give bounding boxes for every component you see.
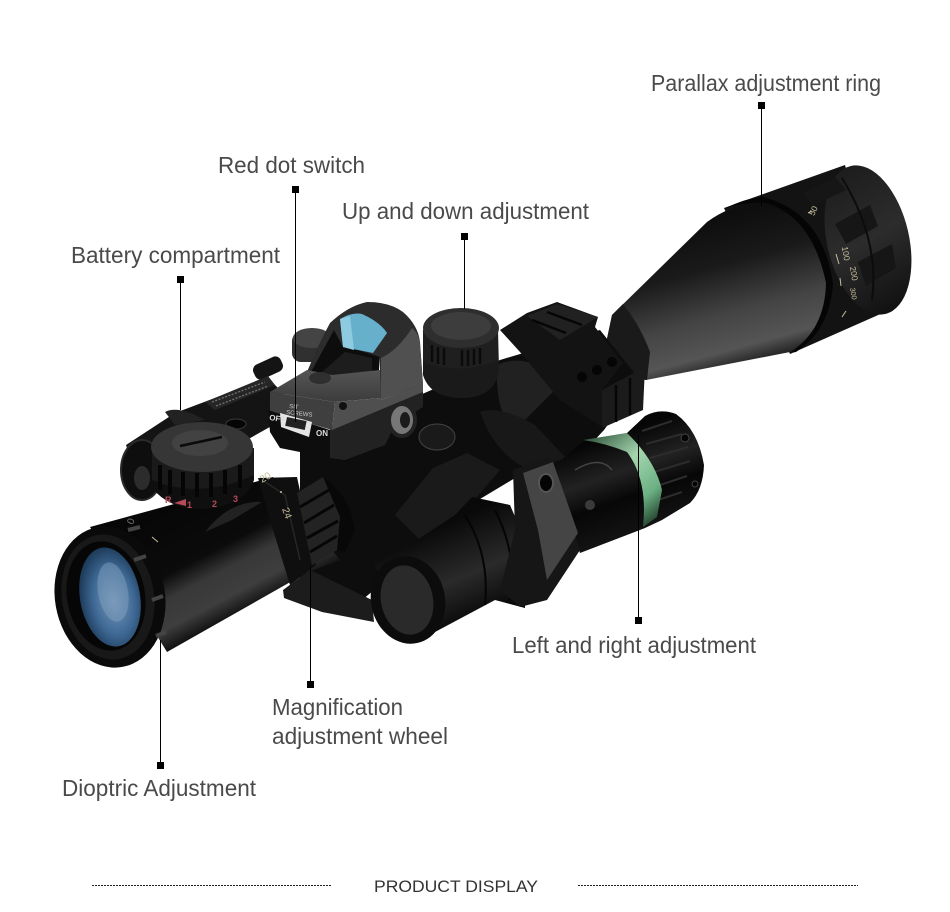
windage turret with red numbers: 2 <box>212 499 217 509</box>
label: up and down adjustment <box>342 198 590 309</box>
label: dioptric adjustment: Dioptric Adjustment <box>62 775 257 801</box>
label: battery compartment <box>71 242 281 410</box>
distance scale markings: 100 <box>840 246 852 262</box>
mount ring <box>500 457 580 607</box>
rear ring mount with rail <box>500 302 645 428</box>
laser module <box>121 376 300 500</box>
label: dioptric adjustment <box>62 640 257 801</box>
label: left and right adjustment: Left and right adjustment <box>512 632 757 658</box>
magnification adjustment wheel <box>297 477 355 565</box>
switch with OFF and ON: ON <box>316 429 328 438</box>
laser and flashlight with mount ring <box>363 411 704 651</box>
switch with OFF and ON <box>269 404 328 438</box>
laser body <box>373 497 525 640</box>
magnification scale markings: 24 <box>279 506 293 521</box>
distance scale markings <box>807 204 860 317</box>
label: parallax adjustment ring: Parallax adjustment ring <box>651 70 881 96</box>
switch with OFF and ON: SIT <box>289 404 299 411</box>
rifle scope assembly <box>44 157 925 676</box>
windage turret with red numbers: R <box>165 495 172 505</box>
magnification scale markings: 0 <box>125 517 138 526</box>
label: left and right adjustment <box>512 435 757 658</box>
label: battery compartment: Battery compartment <box>71 242 281 268</box>
distance scale markings: 50 <box>807 204 820 217</box>
label: magnification adjustment wheel: Magnification <box>272 694 403 720</box>
label: red dot switch: Red dot switch <box>218 152 365 178</box>
central scope body and mount <box>283 330 640 622</box>
front scope tube <box>90 470 340 652</box>
label: magnification adjustment wheel: adjustment wheel <box>272 723 448 749</box>
label: parallax adjustment ring <box>651 70 881 206</box>
label: red dot switch <box>218 152 365 422</box>
rear parallax objective bell <box>600 157 925 380</box>
windage turret with red numbers: 3 <box>233 494 238 504</box>
distance scale markings: 300 <box>848 287 859 300</box>
green ring <box>583 433 662 527</box>
up and down adjustment turret <box>423 308 499 398</box>
objective lens front <box>44 518 176 676</box>
switch with OFF and ON: OFF <box>269 413 286 424</box>
rear left small knob <box>251 328 331 382</box>
label: magnification adjustment wheel <box>272 566 448 749</box>
windage turret with red numbers <box>151 422 254 510</box>
mount screws <box>389 404 415 436</box>
magnification scale markings: 20 <box>258 470 274 486</box>
blue lens glass <box>340 314 387 353</box>
label: up and down adjustment: Up and down adjustment <box>342 198 590 224</box>
footer: product display: PRODUCT DISPLAY <box>374 877 538 896</box>
switch with OFF and ON: SCREWS <box>286 410 313 419</box>
distance scale markings: 200 <box>848 266 860 282</box>
windage turret with red numbers: 1 <box>187 500 192 510</box>
red dot sight and switch <box>268 302 455 460</box>
magnification scale markings <box>125 470 293 542</box>
